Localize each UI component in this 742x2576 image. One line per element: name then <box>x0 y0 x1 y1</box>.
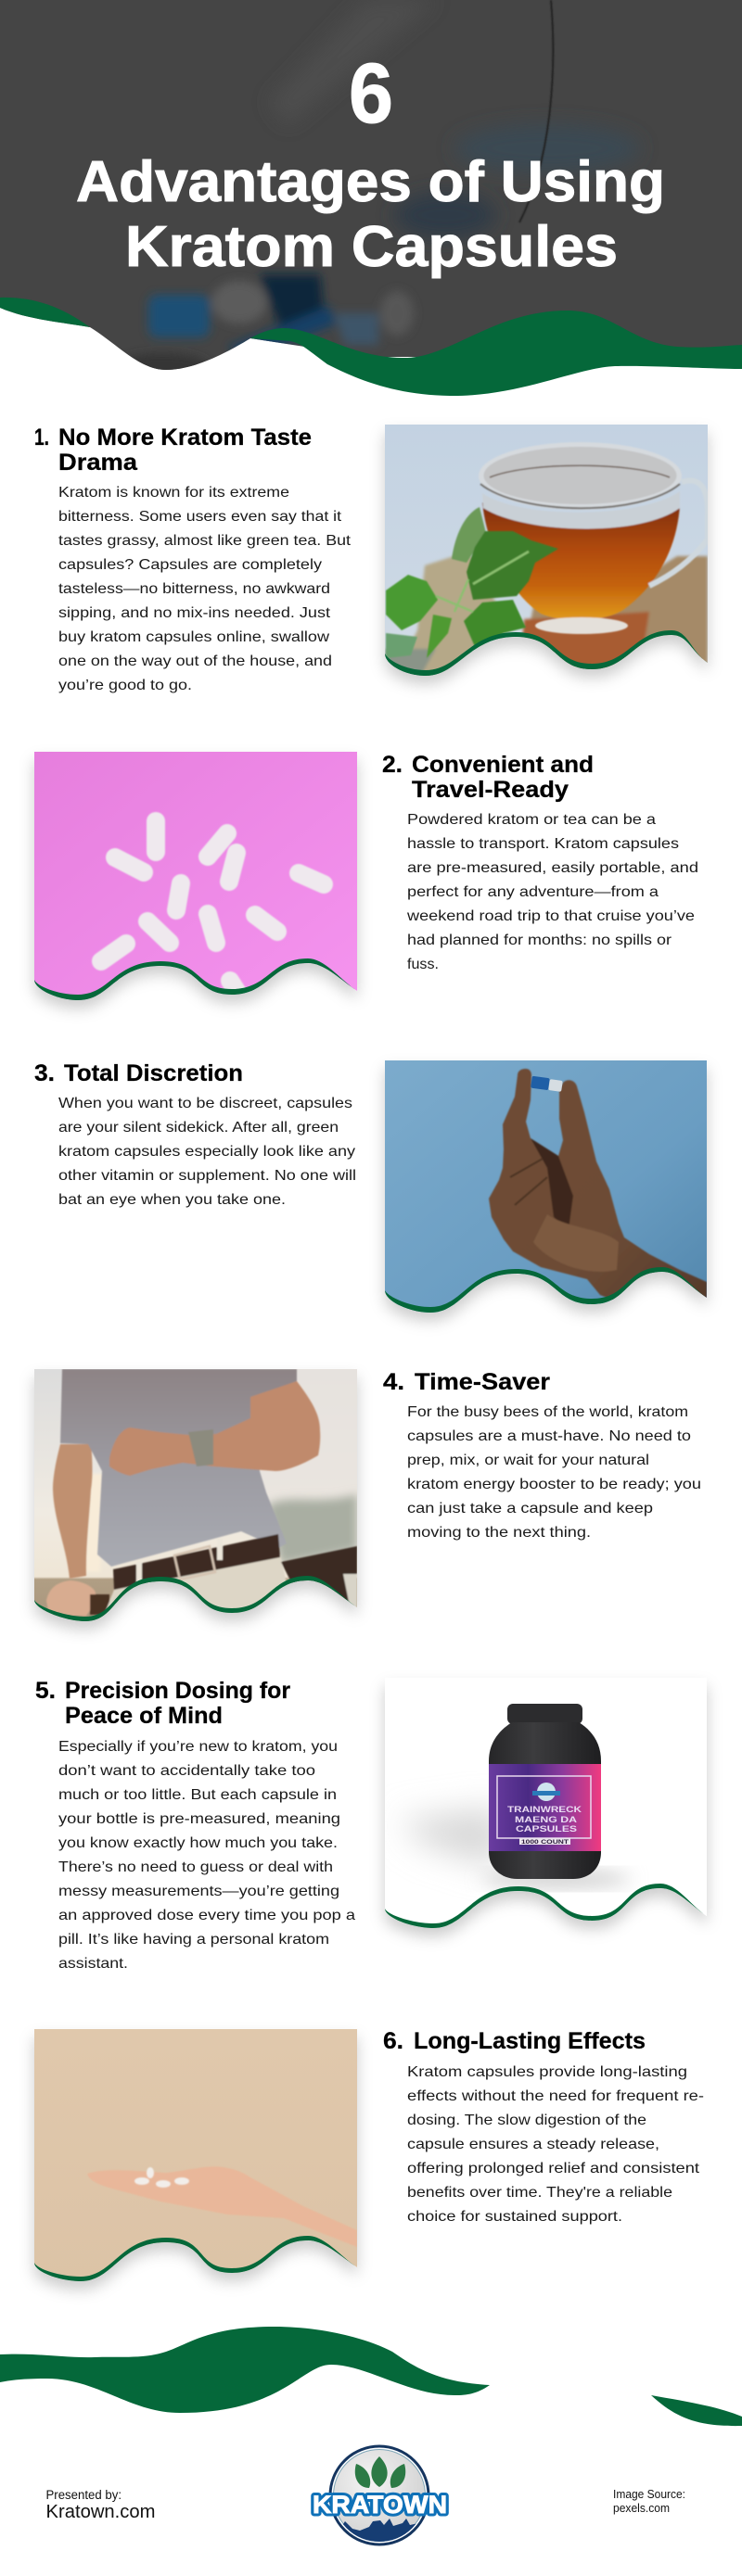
heading 2: Travel-Ready <box>412 777 569 803</box>
body 3: other vitamin or supplement. No one will <box>58 1168 356 1184</box>
heading 5 <box>35 1678 290 1729</box>
heading 3: Total Discretion <box>64 1060 243 1086</box>
logo: Kratown: KRATOWN <box>313 2491 447 2519</box>
heading 1 <box>34 425 312 476</box>
footer wave left <box>0 2327 490 2413</box>
body 4: prep, mix, or wait for your natural <box>407 1453 649 1468</box>
body 6: Kratom capsules provide long-lasting <box>407 2064 687 2080</box>
body 6: capsule ensures a steady release, <box>407 2137 659 2152</box>
green wave edge <box>34 1576 357 1621</box>
title: Kratom Capsules <box>125 215 618 279</box>
heading 5: Precision Dosing for <box>65 1678 290 1704</box>
body 6 <box>407 2064 704 2225</box>
body 1: Kratom is known for its extreme <box>58 485 289 501</box>
body 1: tasteless—no bitterness, no awkward <box>58 581 330 597</box>
body 4 <box>407 1404 701 1541</box>
body 1: sipping, and no mix-ins needed. Just <box>58 605 331 621</box>
body 2: hassle to transport. Kratom capsules <box>407 836 679 852</box>
heading 4: Time-Saver <box>415 1369 550 1395</box>
body 2: fuss. <box>407 957 439 972</box>
body 6: dosing. The slow digestion of the <box>407 2113 646 2128</box>
body 1 <box>58 485 352 693</box>
panel: advantage 4 text <box>383 1369 701 1541</box>
body 1: tastes grassy, almost like green tea. But <box>58 533 352 549</box>
header photo background <box>0 0 742 379</box>
footer wave right <box>651 2395 742 2426</box>
body 5: pill. It’s like having a personal kratom <box>58 1932 329 1948</box>
body 5: don’t want to accidentally take too <box>58 1763 315 1779</box>
body 5: Especially if you’re new to kratom, you <box>58 1739 338 1755</box>
body 1: capsules? Capsules are completely <box>58 557 322 573</box>
presenter credit <box>46 2488 156 2522</box>
body 4: kratom energy booster to be ready; you <box>407 1477 701 1492</box>
body 4: moving to the next thing. <box>407 1525 591 1541</box>
green wave edge <box>385 630 708 676</box>
image source credit: Image Source: <box>613 2488 685 2501</box>
body 3: When you want to be discreet, capsules <box>58 1096 352 1111</box>
body 2 <box>406 812 698 972</box>
presenter credit: Kratown.com <box>46 2502 156 2522</box>
heading 4: 4. <box>383 1369 404 1395</box>
body 2: perfect for any adventure—from a <box>407 884 659 900</box>
body 5: messy measurements—you’re getting <box>58 1884 339 1899</box>
title: Advantages of Using <box>76 150 665 214</box>
panel: photo of hand holding pills <box>34 2029 357 2289</box>
heading 2: 2. <box>382 752 403 778</box>
body 2: are pre-measured, easily portable, and <box>407 860 698 876</box>
heading 2 <box>382 752 594 803</box>
body 2: Powdered kratom or tea can be a <box>407 812 656 828</box>
body 6: offering prolonged relief and consistent <box>407 2161 700 2176</box>
heading 3: 3. <box>34 1060 55 1086</box>
green wave edge <box>34 958 357 1000</box>
jar with label: CAPSULES <box>516 1824 577 1834</box>
presenter credit: Presented by: <box>46 2488 122 2502</box>
heading 6: Long-Lasting Effects <box>414 2028 646 2054</box>
green wave edge <box>385 1884 707 1928</box>
panel: advantage 1 text <box>34 425 352 693</box>
heading 1: No More Kratom Taste <box>58 425 312 450</box>
body 3: are your silent sidekick. After all, green <box>58 1120 339 1136</box>
body 3: bat an eye when you take one. <box>58 1192 286 1208</box>
panel: advantage 2 text <box>382 752 698 972</box>
logo: Kratown <box>313 2446 447 2547</box>
green wave left <box>0 298 90 327</box>
heading 1: Drama <box>58 450 138 476</box>
body 5: much or too little. But each capsule in <box>58 1787 337 1803</box>
jar with label: TRAINWRECK <box>507 1805 582 1815</box>
body 1: buy kratom capsules online, swallow <box>58 629 329 645</box>
title <box>76 46 665 279</box>
body 2: weekend road trip to that cruise you’ve <box>406 908 695 924</box>
body 5: you know exactly how much you take. <box>58 1835 338 1851</box>
panel: advantage 6 text <box>383 2028 704 2225</box>
body 5: There’s no need to guess or deal with <box>58 1859 333 1875</box>
body 6: benefits over time. They're a reliable <box>407 2185 672 2201</box>
heading 1: 1. <box>34 425 49 450</box>
title: 6 <box>349 46 393 141</box>
body 5: your bottle is pre-measured, meaning <box>58 1811 340 1827</box>
panel: advantage 3 text <box>34 1060 356 1208</box>
panel: photo of hand holding capsule <box>385 1060 708 1329</box>
body 3 <box>58 1096 356 1208</box>
panel: photo of capsule jar <box>385 1678 708 1937</box>
body 1: you’re good to go. <box>58 678 192 693</box>
body 6: effects without the need for frequent re- <box>407 2088 704 2104</box>
body 5: assistant. <box>58 1956 128 1972</box>
jar with label <box>489 1704 601 1879</box>
heading 5: Peace of Mind <box>65 1703 223 1729</box>
panel: advantage 5 text <box>35 1678 355 1972</box>
icon: three leaves <box>355 2456 405 2488</box>
body 1: one on the way out of the house, and <box>58 654 332 669</box>
heading 5: 5. <box>35 1678 56 1704</box>
logo: Kratown: KRATOWN <box>313 2491 447 2519</box>
image source credit: pexels.com <box>613 2502 670 2515</box>
heading 6: 6. <box>383 2028 403 2054</box>
body 3: kratom capsules especially look like any <box>58 1144 355 1160</box>
image source credit <box>613 2488 685 2515</box>
header banner with blurred capsule photo <box>0 0 742 396</box>
body 2: had planned for months: no spills or <box>407 933 672 948</box>
body 4: For the busy bees of the world, kratom <box>407 1404 688 1420</box>
jar with label: 1000 COUNT <box>521 1839 569 1846</box>
green wave edge <box>385 1267 707 1313</box>
green wave edge <box>34 2236 357 2281</box>
panel: photo of man checking wristwatch <box>34 1369 357 1629</box>
icon: city skyline <box>343 2519 416 2542</box>
panel: photo of pills on pink background <box>34 752 357 1011</box>
body 1: bitterness. Some users even say that it <box>58 509 342 525</box>
body 4: can just take a capsule and keep <box>407 1501 653 1516</box>
body 4: capsules are a must-have. No need to <box>407 1428 691 1444</box>
heading 2: Convenient and <box>412 752 594 778</box>
body 5 <box>58 1739 355 1972</box>
panel: photo of tea cup with leaves <box>385 425 708 686</box>
body 5: an approved dose every time you pop a <box>58 1908 355 1923</box>
green wave right <box>250 311 742 396</box>
jar with label: MAENG DA <box>515 1815 577 1825</box>
body 6: choice for sustained support. <box>407 2209 622 2225</box>
